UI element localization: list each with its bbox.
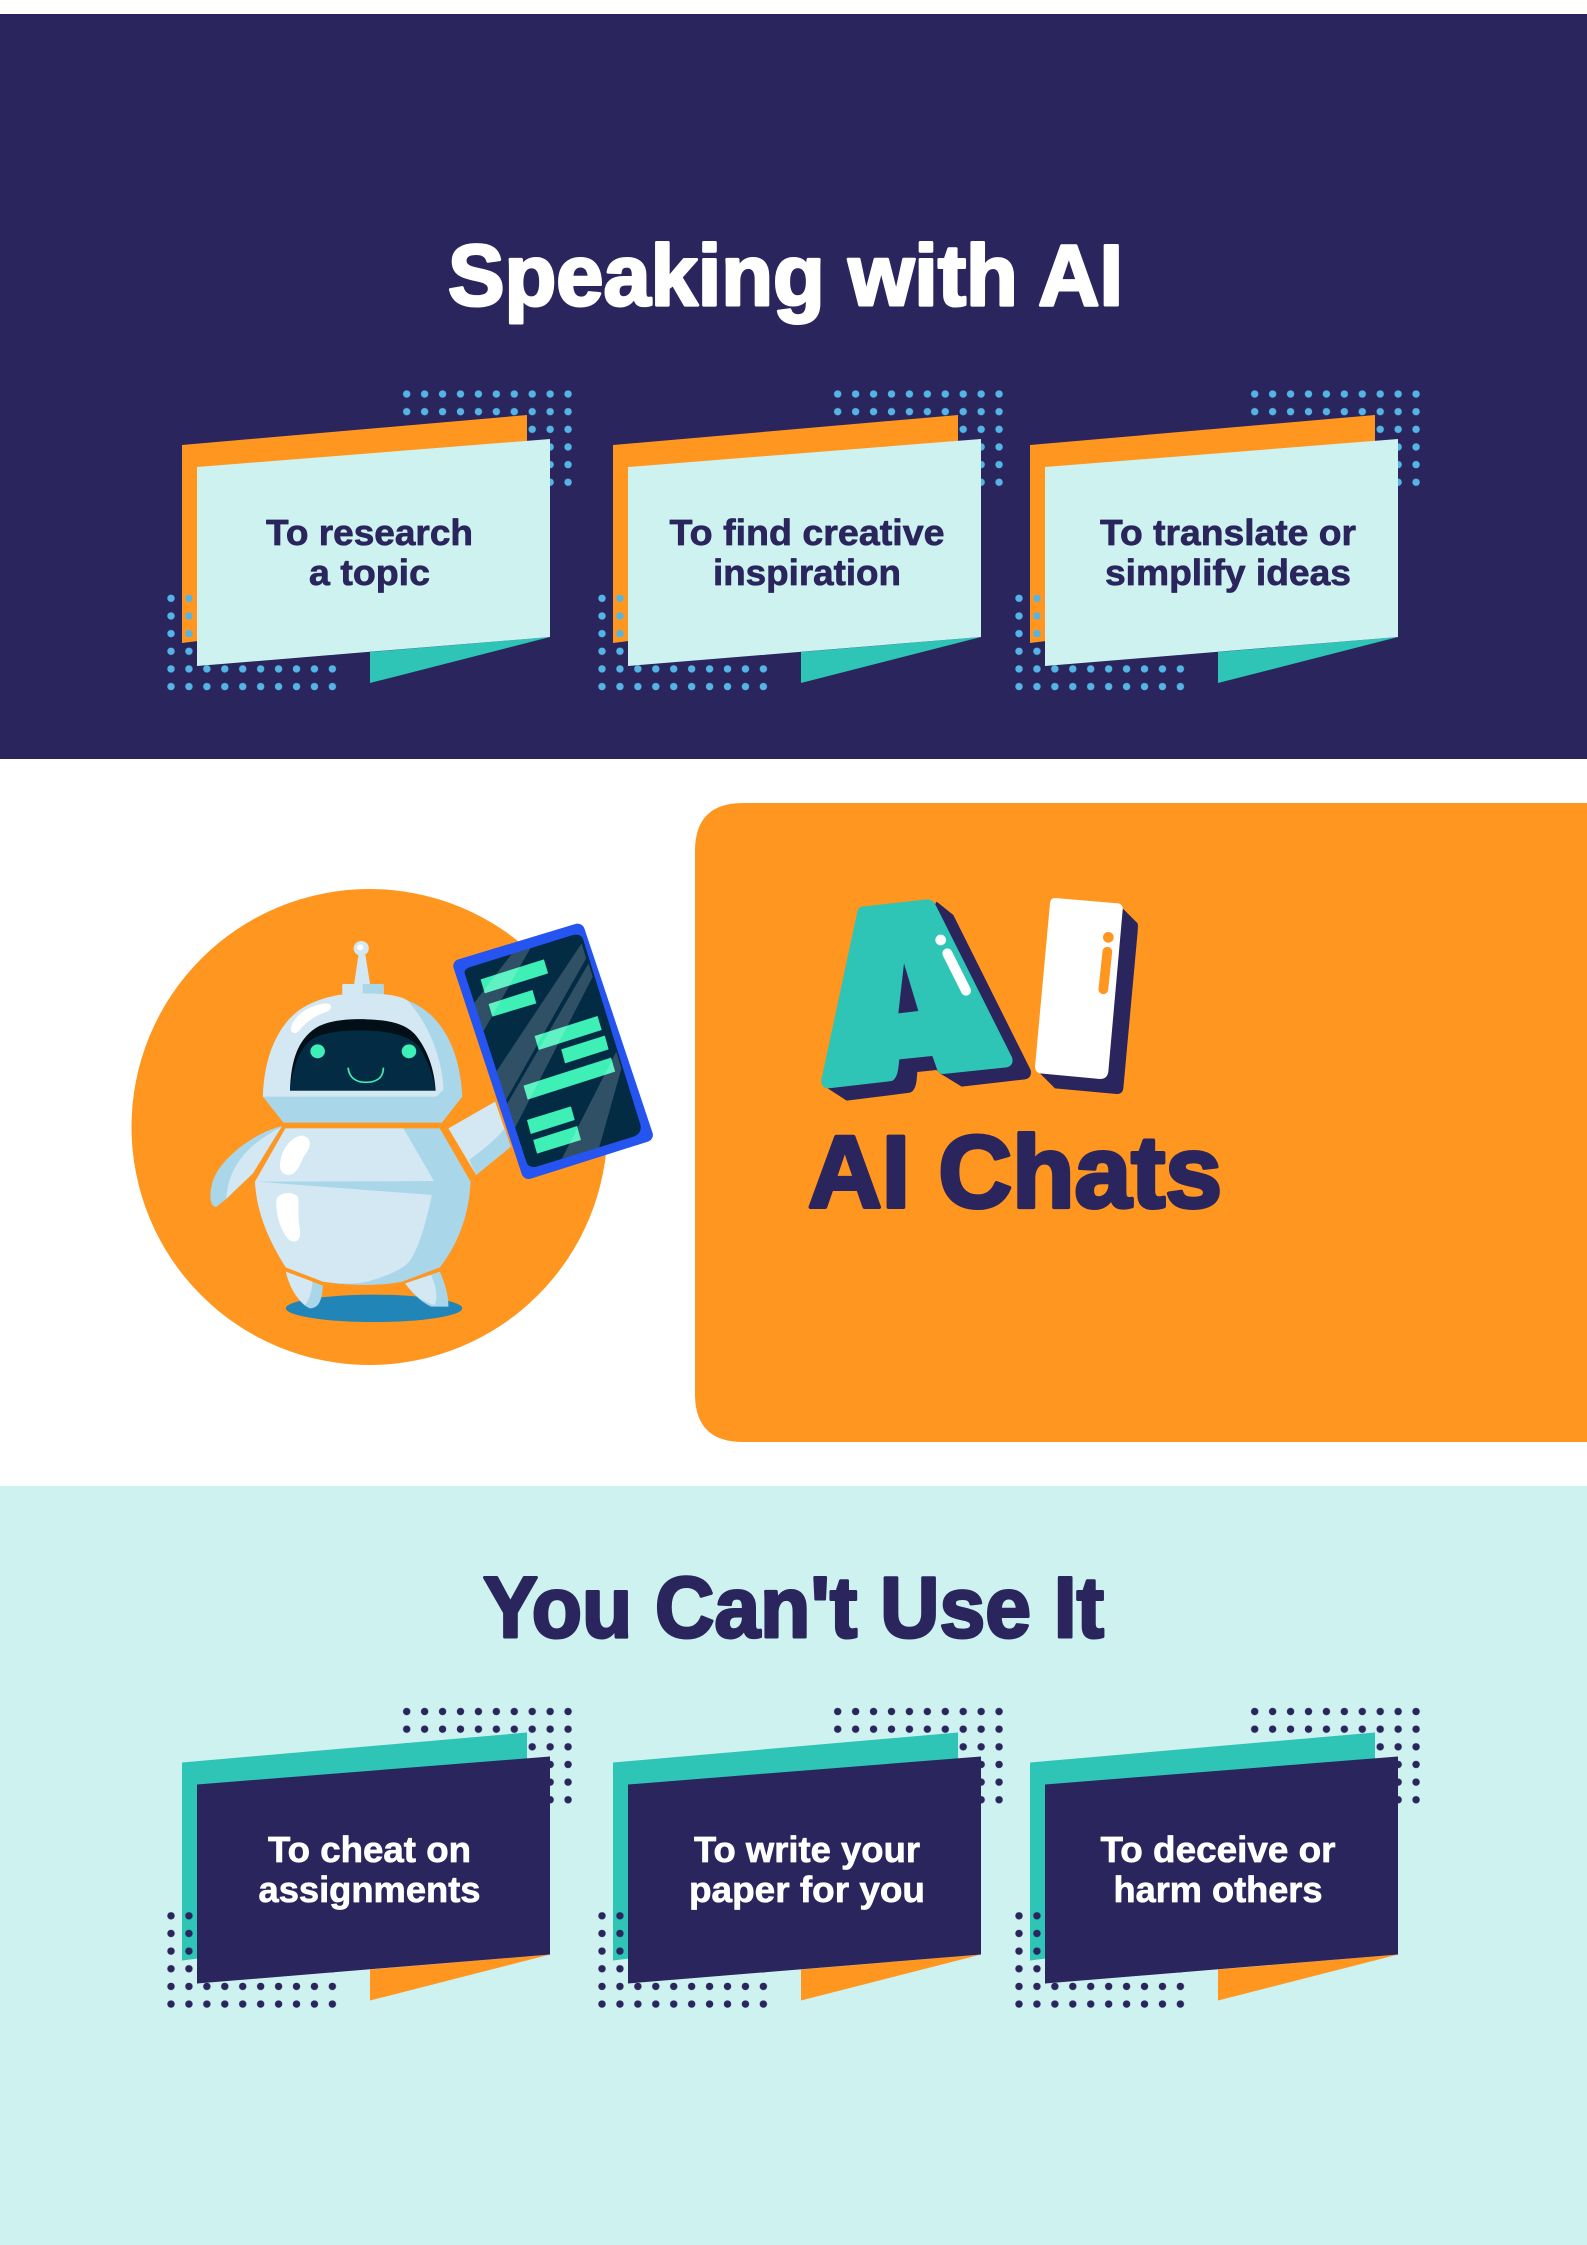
card: to deceive or harm others: harm others bbox=[1114, 1869, 1322, 1910]
heading: AI Chats: AI Chats bbox=[808, 1115, 1222, 1229]
heading: Speaking with AI: Speaking with AI bbox=[448, 228, 1123, 324]
card: to cheat on assignments: To cheat on bbox=[268, 1829, 471, 1870]
card: to write your paper for you: paper for you bbox=[689, 1869, 925, 1910]
panel: AI Chats orange bbox=[695, 803, 1587, 1442]
panel: speaking with AI bbox=[0, 14, 1587, 759]
card: to research a topic bbox=[162, 385, 577, 695]
card: to write your paper for you bbox=[593, 1703, 1008, 2013]
icon: tablet with chat bubbles bbox=[461, 931, 646, 1172]
card: to find creative inspiration: To find creative bbox=[670, 512, 944, 553]
logo: 3D AI letters bbox=[821, 898, 1138, 1101]
card: to translate or simplify ideas: To translate or bbox=[1100, 512, 1356, 553]
card: to translate or simplify ideas bbox=[1010, 385, 1425, 695]
card: to cheat on assignments: assignments bbox=[258, 1869, 480, 1910]
card: to translate or simplify ideas: simplify ideas bbox=[1105, 552, 1351, 593]
illustration: robot holding tablet bbox=[132, 889, 646, 1365]
card: to deceive or harm others bbox=[1010, 1703, 1425, 2013]
card: to write your paper for you: To write your bbox=[694, 1829, 920, 1870]
card: to deceive or harm others: To deceive or bbox=[1100, 1829, 1336, 1870]
card: to cheat on assignments bbox=[162, 1703, 577, 2013]
orange circle backdrop bbox=[132, 889, 608, 1365]
heading: You Can't Use It: You Can't Use It bbox=[483, 1560, 1104, 1656]
card: to find creative inspiration bbox=[593, 385, 1008, 695]
panel: you can't use it bbox=[0, 1486, 1587, 2245]
card: to research a topic: To research bbox=[266, 512, 473, 553]
card: to research a topic: a topic bbox=[309, 552, 430, 593]
icon: robot bbox=[210, 941, 511, 1322]
card: to find creative inspiration: inspiration bbox=[713, 552, 901, 593]
